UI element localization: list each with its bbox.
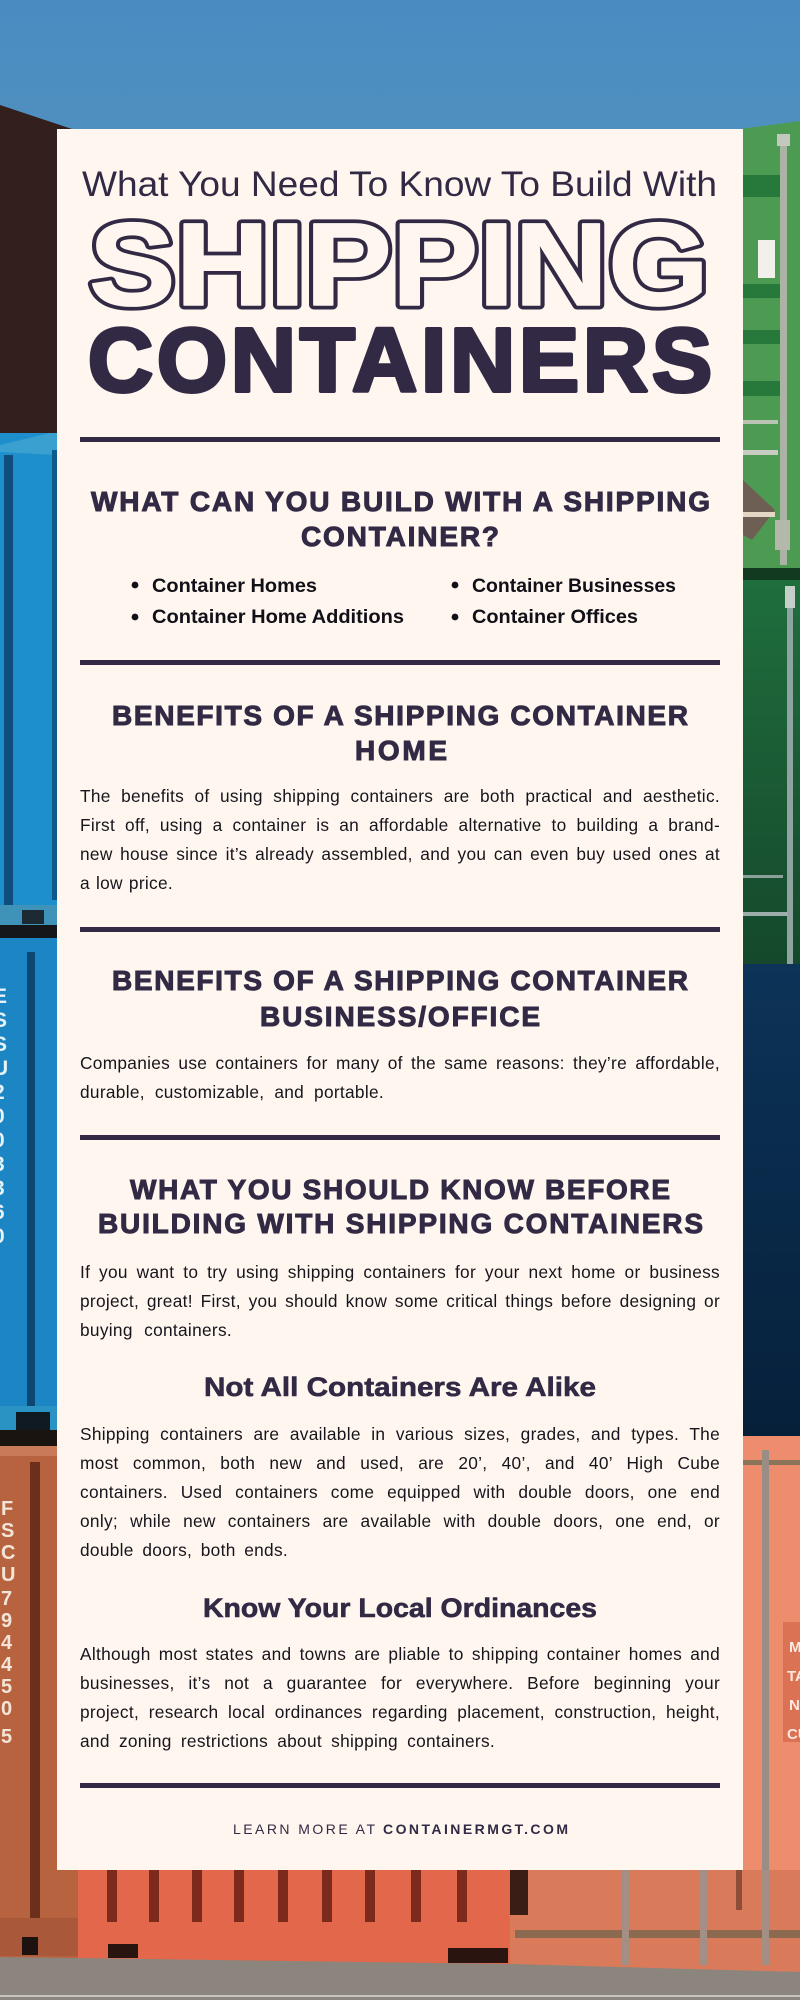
text block: benefits home: First off, using a container is an affordable alternative to building a brand- bbox=[80, 815, 720, 835]
salmon bottom container bbox=[510, 1870, 800, 1972]
title block bbox=[82, 165, 717, 411]
text block: benefits business: Companies use containers for many of the same reasons: they’re affordable, bbox=[80, 1053, 720, 1073]
divider 2 bbox=[80, 660, 720, 665]
text block: benefits home bbox=[80, 786, 720, 893]
bullet list: things to build: Container Businesses bbox=[472, 575, 676, 597]
section heading: benefits home: BENEFITS OF A SHIPPING CONTAINER bbox=[112, 700, 688, 731]
orange bottom container bbox=[78, 1870, 510, 1965]
text block: benefits home: a low price. bbox=[80, 873, 173, 893]
text block: local ordinances: businesses, it’s not a guarantee for everywhere. Before beginning your bbox=[80, 1673, 720, 1693]
white code letters on orange container: C bbox=[1, 1542, 15, 1564]
divider 1 bbox=[80, 437, 720, 442]
text block: local ordinances: Although most states and towns are pliable to shipping container homes and bbox=[80, 1644, 720, 1664]
subheading: not all containers are alike: Not All Containers Are Alike bbox=[204, 1372, 596, 1402]
white code letters on orange container: S bbox=[1, 1520, 14, 1542]
section heading: what you should know: BUILDING WITH SHIPPING CONTAINERS bbox=[98, 1208, 703, 1239]
section heading: what you should know: WHAT YOU SHOULD KNOW BEFORE bbox=[130, 1174, 670, 1205]
title outline word: shipping: SHIPPING bbox=[89, 199, 709, 331]
white code letters on orange container: U bbox=[1, 1564, 15, 1586]
divider 3 bbox=[80, 927, 720, 932]
white code letters on orange container: 9 bbox=[1, 1610, 12, 1632]
section heading: what can you build: WHAT CAN YOU BUILD WITH A SHIPPING bbox=[91, 486, 710, 517]
text block: intro to what you should know: buying containers. bbox=[80, 1320, 232, 1340]
section heading: benefits home: HOME bbox=[355, 735, 447, 766]
footer: learn more: LEARN MORE AT bbox=[233, 1821, 375, 1837]
section heading: benefits business bbox=[112, 965, 688, 1032]
text block: local ordinances: project, research local ordinances regarding placement, construction, height, bbox=[80, 1702, 720, 1722]
text block: container types: Shipping containers are available in various sizes, grades, and types. The bbox=[80, 1424, 720, 1444]
left containers bbox=[0, 105, 75, 440]
right navy container bbox=[743, 964, 800, 1436]
title line: what you need to know: What You Need To Know To Build With bbox=[82, 165, 717, 204]
text block: benefits business: durable, customizable, and portable. bbox=[80, 1082, 384, 1102]
white code letters on orange container: 5 bbox=[1, 1726, 12, 1748]
ground bbox=[0, 1957, 800, 2000]
text block: benefits business bbox=[80, 1053, 720, 1102]
text block: local ordinances bbox=[80, 1644, 720, 1751]
text block: intro to what you should know: project, great! First, you should know some critical things before designing or bbox=[80, 1291, 720, 1311]
text block: intro to what you should know bbox=[80, 1262, 720, 1340]
divider 4 bbox=[80, 1135, 720, 1140]
right salmon container bbox=[743, 1436, 800, 1966]
subheading: know your local ordinances: Know Your Local Ordinances bbox=[203, 1593, 597, 1623]
title outline word: shipping: SHIPPING bbox=[89, 199, 709, 331]
text block: container types: containers. Used containers come equipped with double doors, one end bbox=[80, 1482, 720, 1502]
text block: benefits home: The benefits of using shipping containers are both practical and aesthetic. bbox=[80, 786, 720, 806]
right green containers bbox=[725, 121, 800, 580]
bullet list: things to build: Container Home Additions bbox=[152, 606, 404, 628]
text block: container types: double doors, both ends. bbox=[80, 1540, 288, 1560]
white code letters on orange container: 5 bbox=[1, 1676, 12, 1698]
section heading: benefits business: BUSINESS/OFFICE bbox=[260, 1001, 540, 1032]
text block: container types bbox=[80, 1424, 720, 1560]
white code letters on orange container: 7 bbox=[1, 1588, 12, 1610]
divider 5 bbox=[80, 1783, 720, 1788]
text block: intro to what you should know: If you want to try using shipping containers for your next home or business bbox=[80, 1262, 720, 1282]
bullet list: things to build: Container Offices bbox=[472, 606, 638, 628]
white code letters on orange container: 0 bbox=[1, 1698, 12, 1720]
bullet list: things to build: Container Homes bbox=[152, 575, 317, 597]
section heading: benefits home bbox=[112, 700, 688, 766]
title solid word: containers: CONTAINERS bbox=[88, 311, 712, 411]
panel: main cream card bbox=[57, 129, 743, 1870]
text block: container types: most common, both new and used, are 20’, 40’, and 40’ High Cube bbox=[80, 1453, 720, 1473]
text block: benefits home: new house since it’s already assembled, and you can even buy used ones at bbox=[80, 844, 720, 864]
bullet list: things to build bbox=[132, 575, 676, 628]
section heading: what you should know bbox=[98, 1174, 703, 1239]
white code letters on orange container: 4 bbox=[1, 1632, 13, 1654]
text block: container types: only; while new containers are available with double doors, one end, or bbox=[80, 1511, 720, 1531]
section heading: what can you build: CONTAINER? bbox=[301, 521, 499, 552]
text block: local ordinances: and zoning restrictions about shipping containers. bbox=[80, 1731, 495, 1751]
footer: learn more: CONTAINERMGT.COM bbox=[383, 1821, 568, 1837]
white code letters on orange container: F bbox=[1, 1498, 13, 1520]
white code letters on orange container: 4 bbox=[1, 1654, 13, 1676]
section heading: what can you build bbox=[90, 486, 710, 552]
section heading: benefits business: BENEFITS OF A SHIPPING CONTAINER bbox=[112, 965, 688, 996]
